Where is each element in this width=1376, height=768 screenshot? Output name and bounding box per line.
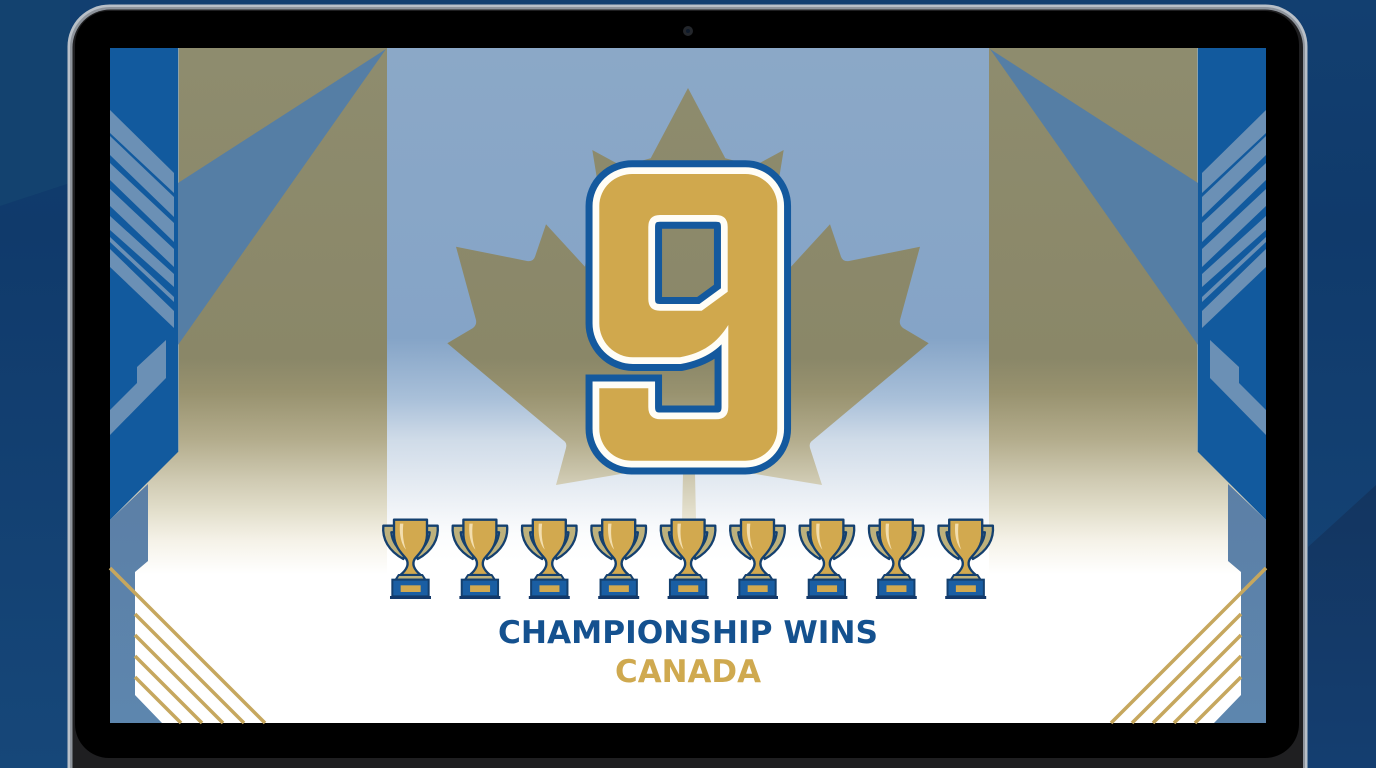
trophy 1 (383, 520, 438, 599)
right side decoration (990, 48, 1266, 723)
trophy 9 (938, 520, 993, 599)
trophy 6 (730, 520, 785, 599)
trophy 5 (661, 520, 715, 599)
big number 9 (599, 174, 777, 461)
trophy 7 (800, 520, 854, 599)
trophy 3 (522, 520, 577, 599)
screen (110, 48, 1266, 723)
row of nine trophies (383, 520, 993, 599)
trophy 4 (591, 520, 646, 599)
webcam (683, 26, 693, 36)
trophy 2 (453, 520, 507, 599)
subheading: canada: CANADA (615, 654, 762, 690)
heading: championship wins: CHAMPIONSHIP WINS (498, 615, 878, 651)
screen background panels (110, 48, 1266, 723)
trophy 8 (869, 520, 924, 599)
icon: maple leaf (447, 88, 929, 520)
left side decoration (110, 48, 386, 723)
